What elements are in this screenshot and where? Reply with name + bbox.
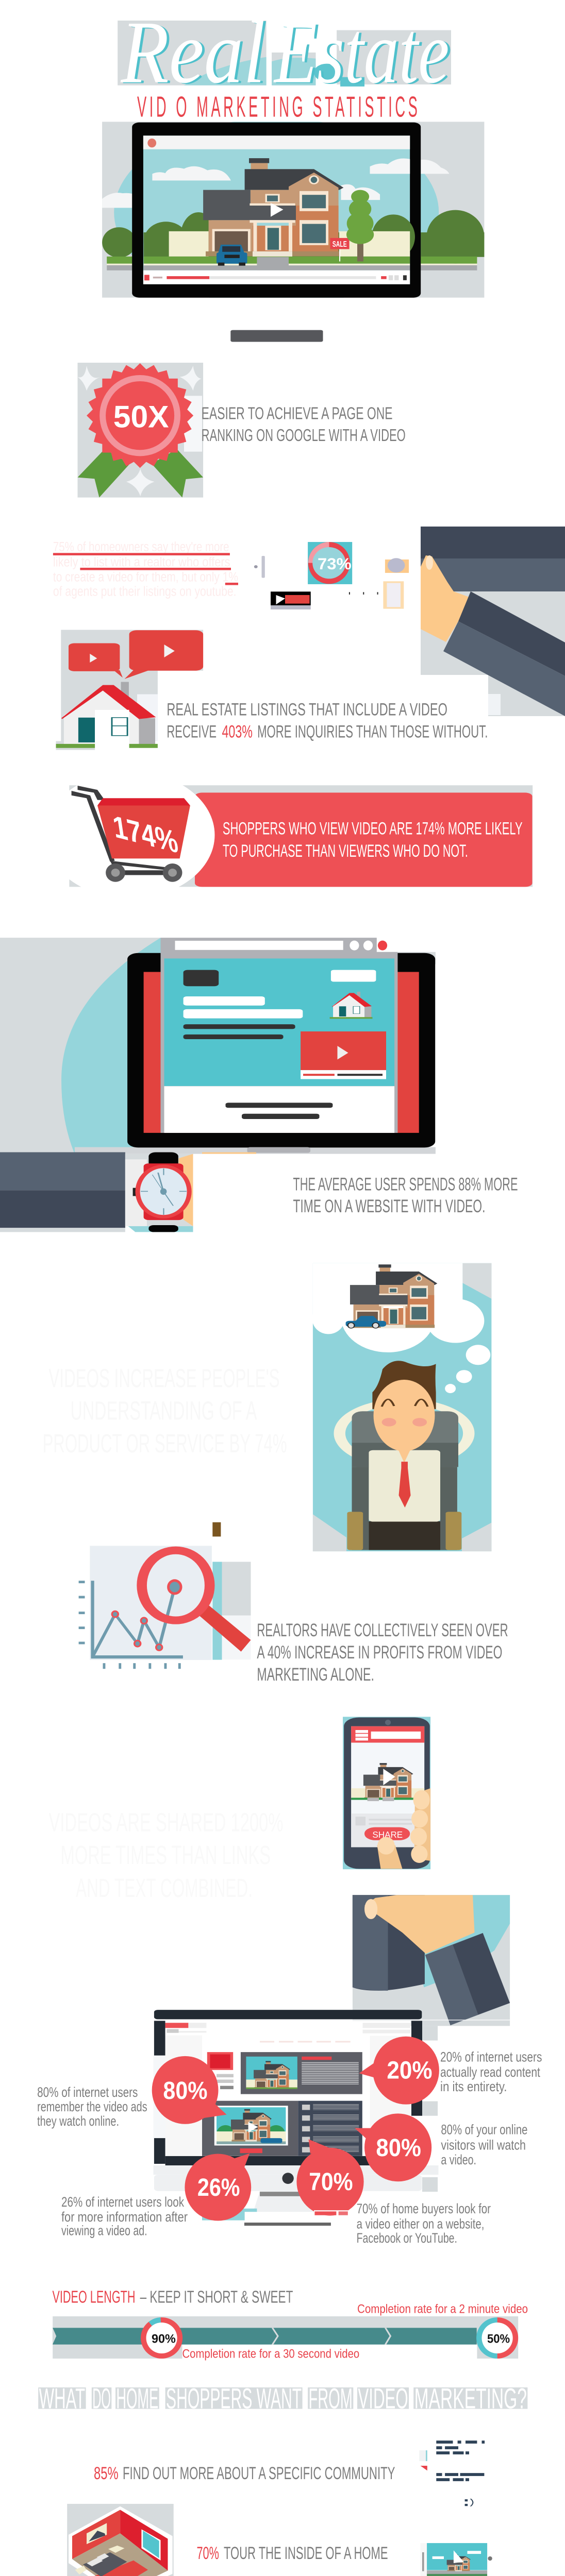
player controls: [143, 273, 410, 284]
stat: 70%: 70%: [197, 2543, 219, 2563]
script heading text: Real: [120, 3, 265, 102]
callout: 20%: 20%: [387, 2056, 433, 2084]
video scene: [143, 135, 415, 284]
stat: 70%: [197, 2543, 388, 2563]
icon: car: [346, 1316, 386, 1328]
section: what home shoppers want: TOUR THE INSIDE OF A HOME: [224, 2543, 388, 2563]
icon: house: [330, 992, 372, 1019]
illustration: arm with wristwatch: [0, 1152, 256, 1226]
panel: shoppers 174%: [45, 771, 533, 899]
section: 40% increase in profits: [48, 1522, 508, 1903]
caption: 70% buyers: [357, 2201, 491, 2246]
badge: 50X: [113, 399, 169, 434]
illustration: isometric bedroom: [67, 2504, 174, 2576]
caption: 80% watch: [441, 2122, 527, 2167]
icon: shopping cart with 174%: 174%: [110, 808, 180, 860]
illustration: hand and sleeve panel: [421, 527, 565, 716]
title background blocks: [118, 21, 451, 87]
share button: SHARE: [372, 1829, 403, 1840]
statement: RECEIVE: [167, 722, 217, 741]
ring: 90%: 90%: [152, 2332, 176, 2346]
caption: 26% look: viewing a video ad.: [61, 2223, 147, 2239]
section: 50X page one ranking: likely to list with a realtor who offers: [53, 554, 230, 569]
callout: 26%: [185, 2154, 251, 2221]
heading: VIDEO LENGTH: [52, 2287, 135, 2307]
caption: 80% remember: [37, 2084, 147, 2129]
section: 403% more inquiries: [45, 630, 533, 899]
statement: [167, 700, 488, 741]
caption: 26% look: for more information after: [61, 2209, 188, 2225]
heading: what do home shoppers want: DO: [92, 2382, 111, 2414]
statement: 403%: [222, 722, 253, 741]
section: understanding by 74%: UNDERSTANDING OF A: [70, 1396, 257, 1426]
icon: dream house: [350, 1264, 437, 1328]
script heading text: Real: [123, 4, 268, 103]
illustration: phone with share button: [343, 1717, 430, 1869]
callout: 70%: [296, 2139, 364, 2216]
caption: 80% remember: they watch online.: [37, 2113, 119, 2129]
hand: [377, 1788, 430, 1869]
heading: what do home shoppers want: WHAT: [39, 2382, 85, 2414]
icon: house with video bubbles: [56, 630, 203, 750]
caption: 26% look: [61, 2194, 188, 2239]
ring: 50%: [476, 2317, 518, 2359]
chart: completion timeline: [53, 2316, 518, 2359]
fragments: text bars: [419, 2441, 485, 2506]
callout: 70%: 70%: [309, 2167, 353, 2196]
callout: 80% left: [152, 2056, 227, 2124]
man in chair: [334, 1361, 474, 1550]
heading: what do home shoppers want: [38, 2382, 527, 2414]
section: what home shoppers want: [52, 2441, 505, 2576]
thought cloud: [312, 1263, 490, 1393]
title: Real Estate: [102, 3, 484, 342]
callout: 80% left: 80%: [163, 2076, 208, 2105]
monitor stand: [230, 330, 323, 342]
illustration: laptop with web page: [0, 938, 436, 1154]
statement: MARKETING ALONE.: [257, 1665, 374, 1685]
statement: [293, 1174, 518, 1216]
callout: 20%: [359, 2037, 439, 2105]
section: video statistics on desktop: 26% of internet users look: [61, 2194, 185, 2210]
badge: [77, 363, 203, 498]
video card 2: [202, 2101, 362, 2156]
statement: [202, 403, 406, 445]
icon: shopping cart with 174%: [72, 786, 190, 882]
illustration: man dreaming of a house: [312, 1263, 491, 1551]
caption: 80% remember: 80% of internet users: [37, 2084, 138, 2100]
heading: what do home shoppers want: VIDEO: [358, 2382, 408, 2414]
tree: [346, 190, 374, 261]
video card 1: [241, 2052, 362, 2094]
illustration: desktop monitor: [154, 2010, 438, 2226]
section: 40% increase in profits: AND TEXT COMBINED.: [76, 1874, 253, 1903]
section: 88% more time on website: [0, 938, 518, 1226]
heading: what do home shoppers want: FROM: [308, 2382, 353, 2414]
video scene: SALE: [333, 240, 347, 249]
illustration: tablet held by hands: [411, 2543, 505, 2576]
sale sign: [330, 238, 350, 261]
subtitle: VID O MARKETING STATISTICS: [137, 91, 418, 123]
watch panel bottom edge: [0, 1225, 193, 1232]
illustration: chart with magnifier: [79, 1522, 251, 1669]
icon: car: [217, 245, 247, 266]
icon: play: [271, 203, 284, 217]
section: video statistics on desktop: remember the video ads: [37, 2098, 147, 2114]
section: video statistics on desktop: [37, 1895, 542, 2246]
stat: 85%: 85%: [94, 2463, 119, 2483]
share button: [364, 1827, 410, 1840]
video player: [301, 1031, 386, 1079]
callout: 26%: 26%: [197, 2173, 240, 2201]
pale statement: [48, 1808, 283, 1903]
section: 50X page one ranking: [53, 363, 409, 609]
ring: 90%: [141, 2317, 182, 2359]
caption: 80% watch: a video.: [441, 2151, 476, 2167]
73% ring and fragments: [254, 542, 409, 609]
section: understanding by 74%: [43, 1263, 491, 1551]
section: 50X page one ranking: 75% of homeowners say they're more: [53, 539, 229, 554]
73% ring and fragments: 73%: [318, 555, 352, 573]
callout: 80% right: [355, 2113, 431, 2181]
callout: 80% right: 80%: [376, 2133, 421, 2162]
section: 50X page one ranking: of agents put their listings on youtube.: [53, 584, 237, 599]
pale statement: [43, 1364, 287, 1458]
caption: 20% read: [440, 2049, 542, 2094]
stat: 85%: [94, 2463, 395, 2483]
ring: 50%: 50%: [487, 2332, 510, 2346]
statement: [257, 1620, 508, 1685]
monitor frame: [132, 123, 421, 298]
section: video length: [38, 2287, 528, 2414]
heading: what do home shoppers want: HOME: [116, 2382, 158, 2414]
pale statement with red underlines: [53, 539, 238, 599]
hero: monitor with house video: [102, 118, 484, 306]
illustration: hand holding monitor: [353, 1895, 510, 2026]
section: 50X page one ranking: to create a video for them, but only 1%: [53, 569, 238, 584]
